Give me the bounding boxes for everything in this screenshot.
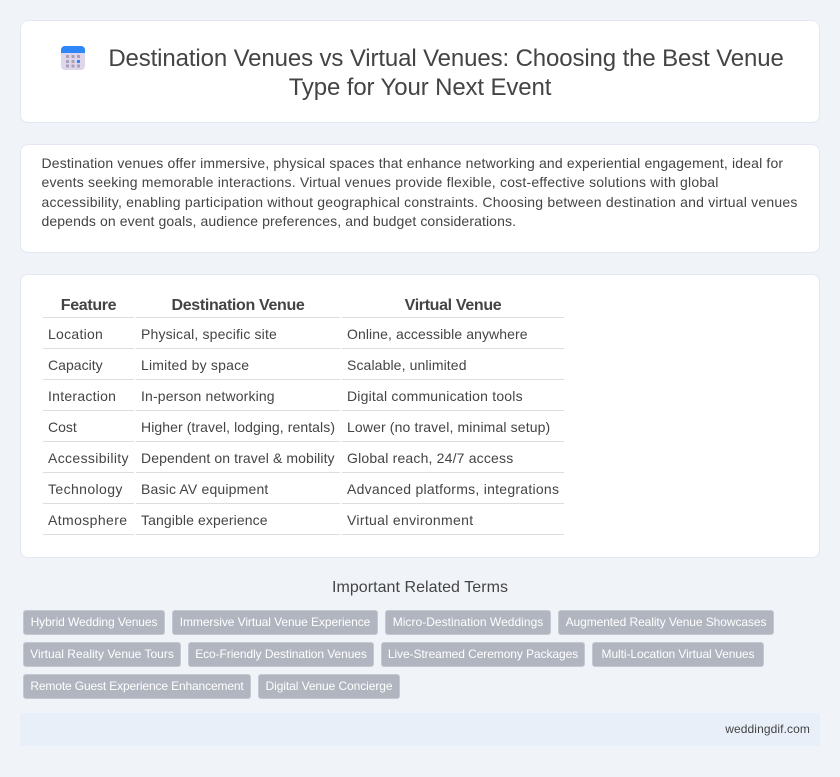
related term tags: Digital Venue Concierge (266, 679, 392, 693)
comparison table: Online, accessible anywhere (347, 326, 528, 342)
heading: related terms: Important Related Terms (332, 579, 508, 596)
comparison table: Feature (61, 297, 116, 314)
comparison table: Global reach, 24/7 access (347, 450, 513, 466)
comparison table: Physical, specific site (141, 326, 277, 342)
related term tags: Live-Streamed Ceremony Packages (388, 647, 578, 661)
comparison table: Accessibility (48, 450, 129, 466)
related term tags: Eco-Friendly Destination Venues (195, 647, 367, 661)
text block: introduction: events seeking memorable interactions. Virtual venues provide flexible, cost-effective solutions with global (42, 174, 719, 190)
comparison table: Limited by space (141, 357, 249, 373)
panel: introduction (20, 144, 820, 253)
comparison table: Cost (48, 419, 77, 435)
text block: introduction: accessibility, enabling participation without geographical constraints. Choosing between destination and virtual venues (42, 194, 798, 210)
comparison table: Advanced platforms, integrations (347, 481, 559, 497)
title: Type for Your Next Event (289, 74, 551, 101)
footer source: weddingdif.com (725, 722, 810, 736)
comparison table (43, 297, 564, 535)
comparison table: Interaction (48, 388, 116, 404)
footer (20, 713, 820, 746)
comparison table: Basic AV equipment (141, 481, 268, 497)
text block: introduction (42, 155, 798, 229)
comparison table: Digital communication tools (347, 388, 523, 404)
comparison table: Atmosphere (48, 512, 127, 528)
panel: comparison table (20, 274, 820, 558)
comparison table: Destination Venue (172, 297, 304, 314)
comparison table: Scalable, unlimited (347, 357, 467, 373)
comparison table: Tangible experience (141, 512, 268, 528)
comparison table: Capacity (48, 357, 103, 373)
title: Destination Venues vs Virtual Venues: Choosing the Best Venue (108, 45, 784, 72)
comparison table: Technology (48, 481, 123, 497)
comparison table: Lower (no travel, minimal setup) (347, 419, 550, 435)
comparison table: Virtual environment (347, 512, 473, 528)
related term tags: Virtual Reality Venue Tours (30, 647, 174, 661)
title (108, 45, 784, 101)
comparison table: Location (48, 326, 103, 342)
related term tags: Immersive Virtual Venue Experience (180, 615, 370, 629)
text block: introduction: Destination venues offer immersive, physical spaces that enhance networking and experiential engagement, ideal for (42, 155, 783, 171)
related term tags: Multi-Location Virtual Venues (602, 647, 754, 661)
related term tags: Augmented Reality Venue Showcases (566, 615, 766, 629)
related term tags: Remote Guest Experience Enhancement (30, 679, 244, 693)
related term tags (23, 610, 774, 699)
icon: calendar (61, 46, 85, 70)
comparison table: Virtual Venue (405, 297, 501, 314)
comparison table: Higher (travel, lodging, rentals) (141, 419, 335, 435)
related term tags: Micro-Destination Weddings (393, 615, 543, 629)
comparison table: In-person networking (141, 388, 275, 404)
text block: introduction: depends on event goals, audience preferences, and budget considerations. (42, 213, 516, 229)
related term tags: Hybrid Wedding Venues (31, 615, 157, 629)
comparison table: Dependent on travel & mobility (141, 450, 335, 466)
panel: header (20, 20, 820, 123)
